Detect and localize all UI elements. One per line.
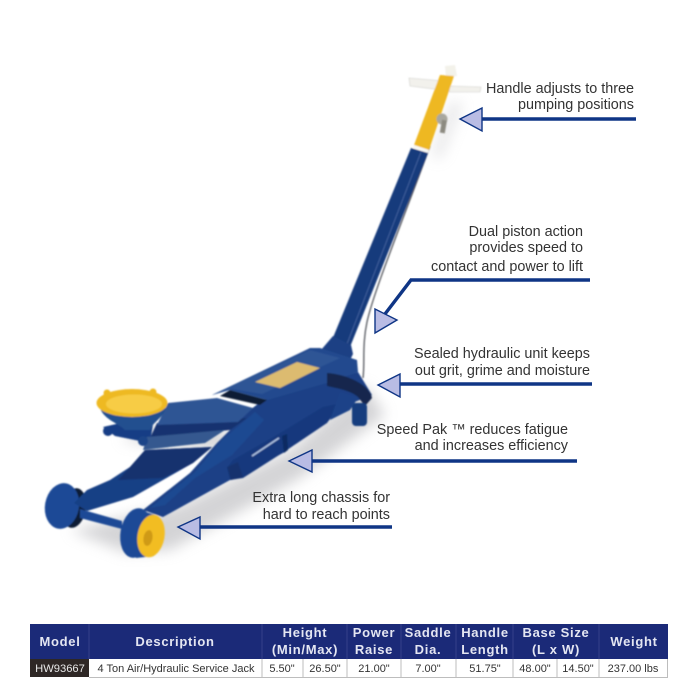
callout: dual piston: contact and power to lift (431, 259, 583, 275)
table data row: 51.75" (469, 663, 501, 675)
handle T-bar (409, 65, 481, 92)
table header: Weight (610, 634, 658, 649)
callout: sealed unit: Sealed hydraulic unit keeps (414, 346, 590, 362)
callout: speed pak (289, 422, 577, 472)
table header: Saddle (405, 625, 451, 640)
arrow: handle (460, 108, 636, 131)
callout: dual piston (375, 224, 590, 333)
white collar (413, 145, 429, 153)
arrow: sealed unit (378, 374, 592, 397)
handle clasp (436, 114, 448, 133)
jack body top plate (212, 348, 358, 400)
table data row: 14.50" (562, 663, 594, 675)
yellow saddle (96, 388, 168, 430)
arrow: speed pak (289, 450, 577, 472)
saddle support (103, 418, 247, 450)
hydraulic floor jack illustration (41, 65, 481, 560)
table header: Power (353, 625, 395, 640)
table data row: 237.00 lbs (608, 663, 659, 675)
right chassis frame (143, 372, 372, 517)
table data row: 21.00" (358, 663, 390, 675)
handle socket (321, 336, 353, 366)
table data row: 48.00" (519, 663, 551, 675)
callout: sealed unit: out grit, grime and moisture (415, 363, 590, 379)
callout: speed pak: and increases efficiency (415, 438, 569, 454)
table data row: HW93667 (35, 663, 85, 675)
callout: handle: Handle adjusts to three (486, 81, 634, 97)
table header: (Min/Max) (272, 642, 338, 657)
axle (80, 509, 122, 529)
table header: Model (39, 634, 81, 649)
callout: chassis (178, 490, 392, 539)
callout: chassis: hard to reach points (263, 507, 390, 523)
table header: Height (283, 625, 327, 640)
callout: dual piston: Dual piston action (469, 224, 583, 240)
table header: Handle (461, 625, 509, 640)
rear curved bracket (327, 373, 372, 426)
callout: speed pak: Speed Pak ™ reduces fatigue (377, 422, 568, 438)
gap under plate (220, 390, 267, 405)
callout: chassis: Extra long chassis for (252, 490, 390, 506)
table header: Length (461, 642, 509, 657)
callout: handle (460, 81, 636, 131)
left chassis arm (74, 447, 212, 511)
specification table (30, 624, 668, 678)
callout: dual piston: provides speed to (469, 240, 583, 256)
lift arm (157, 398, 253, 425)
warning label (255, 362, 320, 388)
callout: handle: pumping positions (518, 97, 634, 113)
left wheel (41, 480, 89, 532)
table header (30, 624, 668, 659)
table header: Base Size (522, 625, 590, 640)
table header: Raise (355, 642, 393, 657)
front right wheel (116, 506, 168, 560)
arrow: dual piston (375, 280, 590, 333)
table data row (30, 659, 668, 678)
table header: (L x W) (532, 642, 580, 657)
arrow: chassis (178, 517, 392, 539)
release hose (363, 146, 430, 378)
table header: Description (135, 634, 215, 649)
yellow handle section (414, 75, 454, 150)
table data row: 4 Ton Air/Hydraulic Service Jack (98, 663, 255, 675)
blue handle shaft (332, 148, 428, 347)
table data row: 26.50" (309, 663, 341, 675)
hydraulic cylinder (227, 403, 342, 480)
table data row: 5.50" (269, 663, 295, 675)
jack shadow (70, 100, 462, 552)
table data row: 7.00" (415, 663, 441, 675)
callout: sealed unit (378, 346, 592, 397)
table header: Dia. (415, 642, 441, 657)
